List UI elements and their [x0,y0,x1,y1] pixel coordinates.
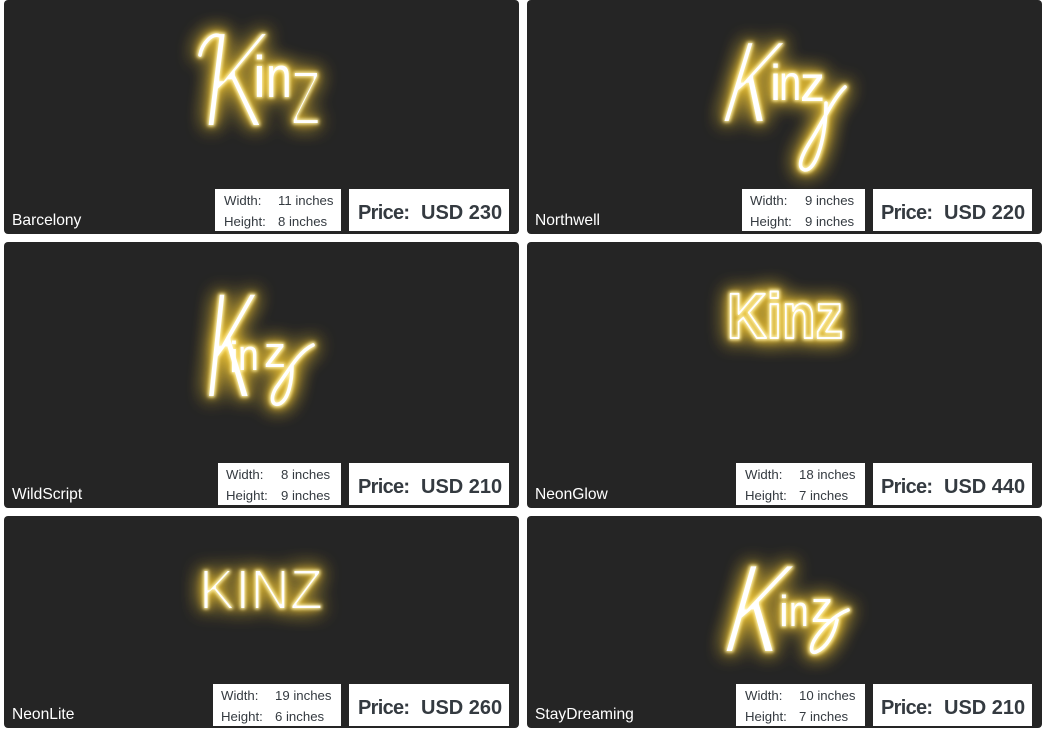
price box [873,189,1032,231]
size box: Height: [224,214,266,229]
neon sign: StayDreaming: z [811,583,833,632]
size box: 10 inches [799,688,855,703]
price box [349,684,509,726]
size box: 18 inches [799,467,855,482]
price box: USD 210 [421,476,502,498]
price box: USD 260 [421,697,502,719]
neon sign: Barcelony: n [266,45,292,110]
neon sign: StayDreaming: i [779,587,789,636]
price box: Price: [358,476,409,498]
neon sign: Northwell: z [800,56,825,112]
label: WildScript: WildScript [12,486,82,503]
price box [349,189,509,231]
price box: USD 210 [944,697,1025,719]
price box [873,463,1032,505]
neon sign: StayDreaming: n [789,587,809,636]
panel: WildScript [4,242,519,508]
price box: USD 220 [944,202,1025,224]
neon sign: WildScript: z [264,328,286,377]
size box: Height: [745,488,787,503]
neon sign: WildScript [191,262,329,430]
panel: NeonGlow [527,242,1042,508]
price box: Price: [358,697,409,719]
panel: Northwell [527,0,1042,234]
panel: NeonLite [4,516,519,728]
size box: Width: [221,688,258,703]
label: Northwell: Northwell [535,212,600,229]
size box: Width: [745,688,782,703]
neon sign: WildScript: K [199,262,264,430]
size box: Width: [745,467,782,482]
panel: StayDreaming [527,516,1042,728]
size box: 7 inches [799,709,848,724]
size box: 6 inches [275,709,324,724]
size box: Height: [745,709,787,724]
size box: 8 inches [278,214,327,229]
label: NeonGlow: NeonGlow [535,486,608,503]
size box: 7 inches [799,488,848,503]
label: NeonLite: NeonLite [12,706,74,723]
price box: USD 440 [944,476,1025,498]
size box [213,684,341,726]
size box [218,463,341,505]
neon sign: Northwell: K [709,18,797,148]
price box: Price: [358,202,409,224]
panel: Barcelony [4,0,519,234]
size box: Height: [221,709,263,724]
size box: Width: [224,193,261,208]
neon sign: Barcelony: i [253,45,266,110]
price box: Price: [881,697,932,719]
price box [349,463,509,505]
size box [742,189,865,231]
price box: Price: [881,202,932,224]
neon sign: Barcelony: K [194,3,280,157]
size box: 9 inches [281,488,330,503]
size box: Height: [750,214,792,229]
size box [736,684,865,726]
size box: 8 inches [281,467,330,482]
size box: 9 inches [805,193,854,208]
neon sign: StayDreaming: K [710,539,807,679]
label: Barcelony: Barcelony [12,212,81,229]
neon sign: WildScript: i [229,333,239,382]
size box: Height: [226,488,268,503]
label: StayDreaming: StayDreaming [535,706,634,723]
size box: 19 inches [275,688,331,703]
neon sign: Barcelony: z [289,34,323,147]
size box: Width: [226,467,263,482]
size box: Width: [750,193,787,208]
size box [215,189,341,231]
neon sign: Northwell: i [770,55,781,111]
neon sign: Northwell: n [779,55,801,111]
neon sign: NeonGlow: Kinz [727,280,843,352]
size box: 11 inches [278,193,333,208]
neon sign: StayDreaming [710,539,864,679]
size box: 9 inches [805,214,854,229]
price box: Price: [881,476,932,498]
neon sign: Northwell [708,18,862,189]
neon sign: Barcelony [182,3,333,157]
neon sign: NeonLite: KINZ [199,558,323,622]
price box [873,684,1032,726]
size box [736,463,865,505]
neon sign: WildScript: n [238,330,259,380]
price box: USD 230 [421,202,502,224]
